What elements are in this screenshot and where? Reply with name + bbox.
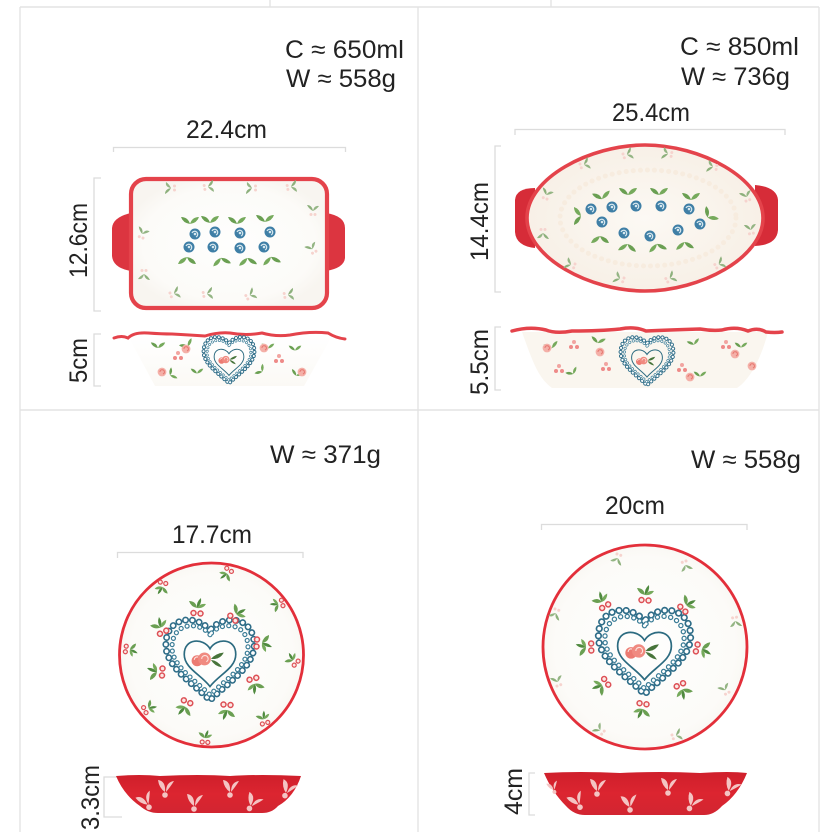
weight label: W ≈ 558g	[691, 446, 801, 474]
height dimension: 4cm	[500, 768, 528, 815]
length dimension	[466, 146, 501, 292]
panel: large round plate	[500, 446, 801, 815]
width dimension: 25.4cm	[612, 99, 690, 127]
width dimension	[114, 116, 346, 152]
height dimension: 5cm	[65, 338, 93, 383]
weight label: W ≈ 371g	[270, 441, 381, 469]
panel: rectangular dish	[65, 36, 404, 386]
capacity and weight label: C ≈ 650ml	[285, 36, 404, 64]
length dimension	[65, 178, 101, 311]
length dimension: 14.4cm	[466, 182, 494, 261]
length dimension: 12.6cm	[65, 203, 93, 278]
height dimension	[77, 765, 122, 830]
width dimension	[515, 99, 785, 135]
height dimension: 3.3cm	[77, 765, 105, 830]
panel: small round plate	[77, 441, 381, 830]
large plate side view	[544, 772, 747, 815]
width dimension: 17.7cm	[172, 521, 252, 549]
large plate top view	[543, 545, 747, 749]
height dimension: 5.5cm	[466, 329, 494, 395]
width dimension	[542, 492, 747, 530]
capacity and weight label: W ≈ 736g	[681, 63, 790, 91]
width dimension: 20cm	[605, 492, 665, 520]
capacity and weight label: W ≈ 558g	[286, 65, 396, 93]
capacity and weight label	[680, 33, 799, 91]
small plate side view	[116, 775, 301, 815]
width dimension	[118, 521, 303, 558]
capacity and weight label	[285, 36, 404, 93]
oval dish side view	[512, 328, 782, 388]
small plate top view	[120, 563, 304, 747]
width dimension: 22.4cm	[186, 116, 267, 144]
rectangular dish side view	[114, 332, 345, 386]
rectangular dish top view	[112, 179, 345, 308]
panel: oval dish	[466, 33, 799, 395]
capacity and weight label: C ≈ 850ml	[680, 33, 799, 61]
oval dish top view	[515, 145, 778, 291]
